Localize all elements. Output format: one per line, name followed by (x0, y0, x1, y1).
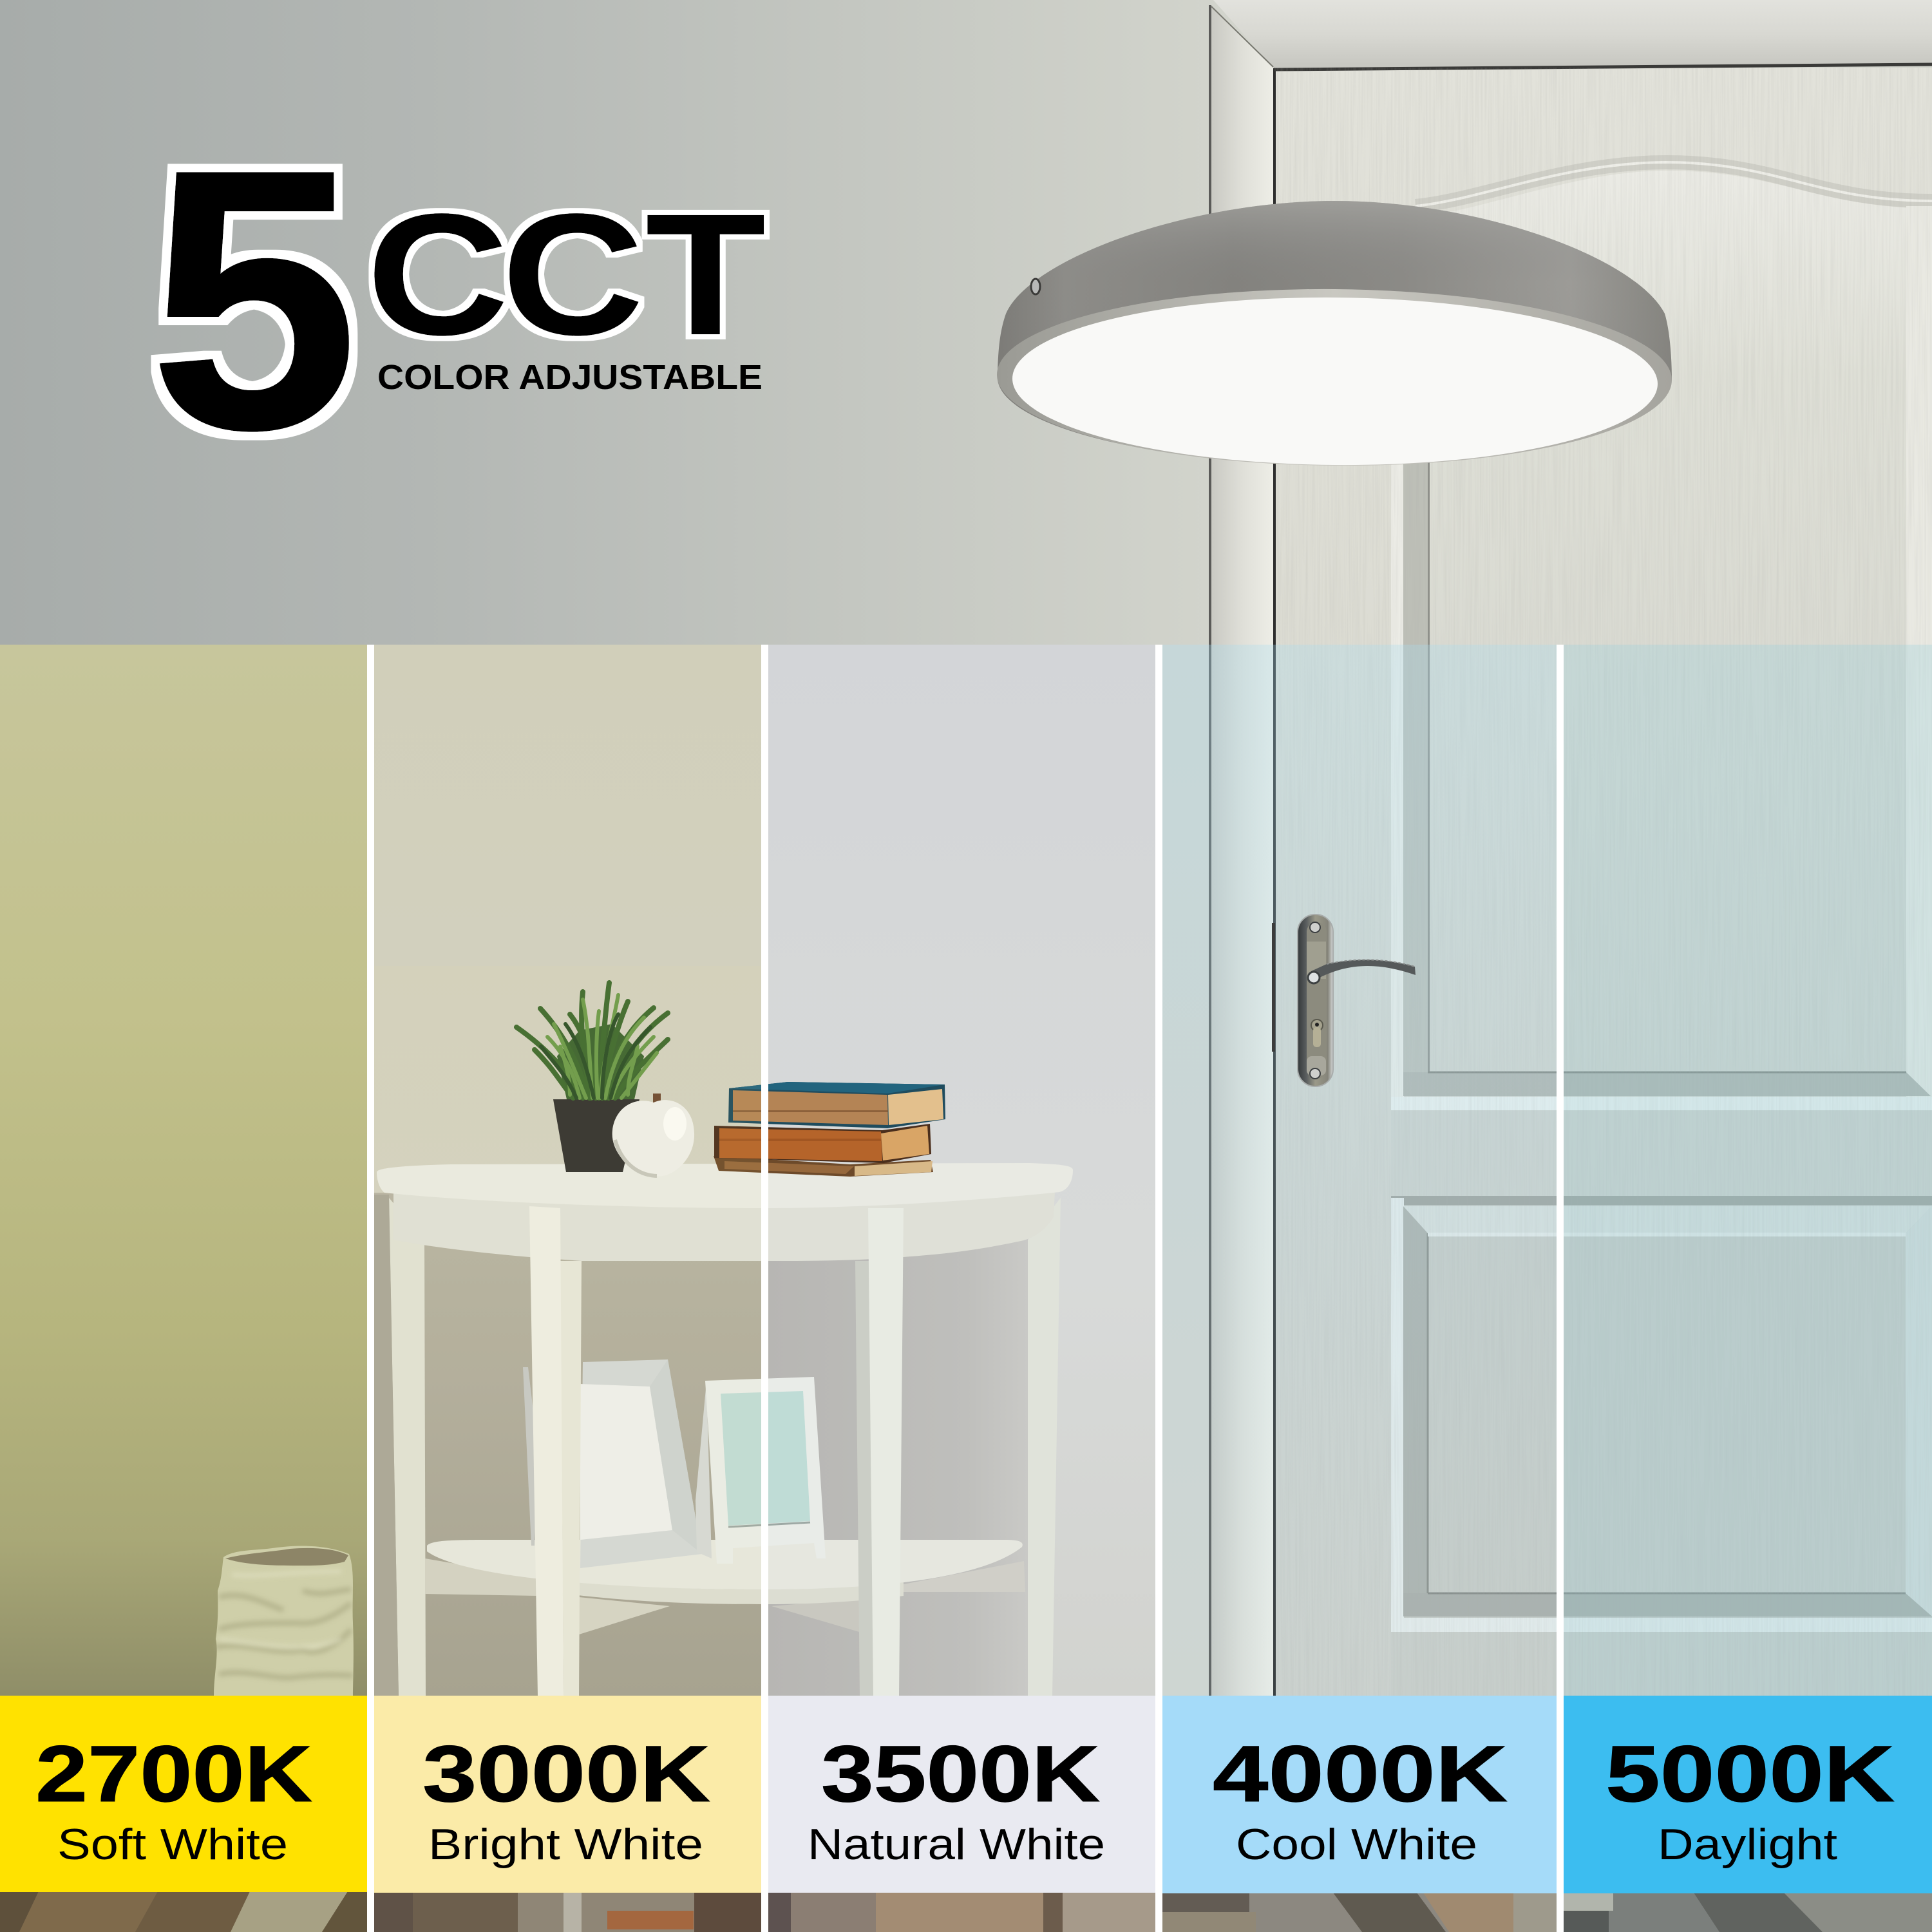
door jamb (1210, 5, 1274, 1696)
panel: 5000K tint (1564, 645, 1932, 1696)
icon: door handle (1272, 914, 1416, 1086)
middle rail (1391, 1097, 1932, 1110)
ceiling light fixture (996, 201, 1672, 469)
heading: 5 CCT (149, 93, 766, 507)
label: 3500K Natural White: Natural White (808, 1820, 1105, 1869)
panel: 3500K wall (768, 645, 1155, 1696)
panel: 4000K tint (1162, 645, 1557, 1696)
wood grain texture (1275, 68, 1932, 1696)
warm tint over table in 3000K zone (374, 966, 761, 1696)
small photo frame (696, 1377, 826, 1564)
label: 2700K Soft White: Soft White (57, 1820, 288, 1869)
door slab (1275, 68, 1932, 1696)
label: 3000K Bright White (374, 1696, 761, 1893)
front right leg (855, 1208, 904, 1696)
table apron (393, 1192, 1055, 1261)
middle book (714, 1124, 931, 1163)
table top (377, 1163, 1073, 1208)
fixture screw (1031, 279, 1040, 294)
big numeral 5: 5 (149, 93, 359, 507)
shelf support bars (425, 1558, 538, 1596)
lower raised panel (1391, 1196, 1932, 1631)
back left leg (389, 1198, 426, 1696)
label: 2700K Soft White: 2700K (35, 1730, 312, 1819)
wall background top (0, 0, 1932, 645)
shelf braces (579, 1597, 670, 1634)
upper raised panel (1391, 171, 1932, 1097)
shelf (427, 1540, 1023, 1604)
books (714, 1082, 945, 1177)
bottom book (714, 1156, 933, 1177)
panel: 2700K wall (0, 645, 367, 1696)
label: 4000K Cool White (1162, 1696, 1557, 1893)
vase interior (225, 1548, 348, 1566)
label: 4000K Cool White: Cool White (1236, 1820, 1477, 1869)
vase (214, 1546, 354, 1696)
plant (516, 983, 668, 1099)
apple (612, 1094, 694, 1177)
label: 5000K Daylight: 5000K (1605, 1730, 1895, 1819)
label: 2700K Soft White (0, 1696, 367, 1892)
label: 5000K Daylight: Daylight (1658, 1820, 1837, 1869)
console table (374, 983, 1073, 1696)
label: 3500K Natural White (768, 1696, 1155, 1893)
door header (1213, 0, 1932, 68)
label: 3500K Natural White: 3500K (821, 1730, 1100, 1819)
left side shade (374, 1195, 399, 1696)
fixture lens (1012, 295, 1658, 468)
label: 3000K Bright White: Bright White (428, 1820, 703, 1869)
back right leg (1028, 1198, 1061, 1696)
front left leg (529, 1206, 582, 1696)
fixture rim (996, 286, 1672, 469)
plant pot (553, 1099, 639, 1172)
CCT: CCT (366, 178, 766, 372)
floor planks (0, 1890, 1932, 1932)
fixture housing (998, 201, 1672, 464)
label: 3000K Bright White: 3000K (422, 1730, 710, 1819)
label: 5000K Daylight (1564, 1696, 1932, 1893)
top book (728, 1082, 945, 1128)
label: 4000K Cool White: 4000K (1213, 1730, 1508, 1819)
subheading: COLOR ADJUSTABLE (377, 358, 762, 397)
wall right of dividers (1155, 645, 1213, 1696)
panel: 3000K wall (374, 645, 761, 1696)
large photo frame (523, 1359, 702, 1568)
door frame and door (1210, 0, 1932, 1696)
